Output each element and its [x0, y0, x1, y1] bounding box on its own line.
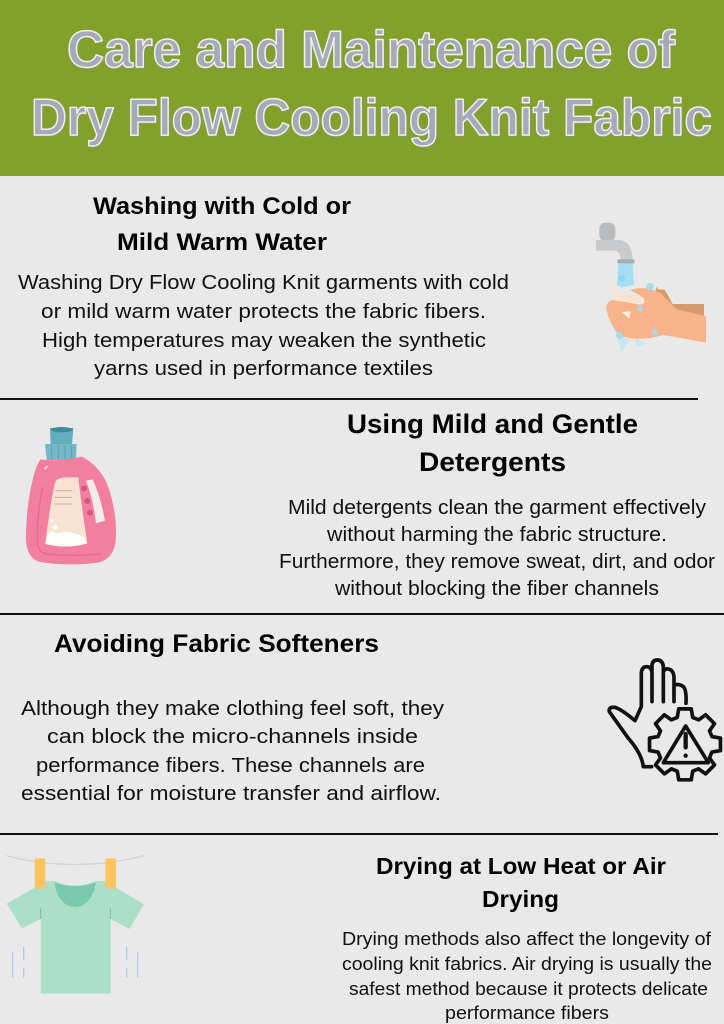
heading: washing: Washing with Cold or — [93, 193, 351, 220]
panel: softeners — [21, 630, 720, 805]
heading: detergents — [347, 409, 638, 477]
icon: washing hands under faucet — [596, 223, 706, 352]
text: detergents: Furthermore, they remove sweat, dirt, and odor — [279, 551, 715, 573]
heading: washing: Mild Warm Water — [117, 229, 327, 256]
heading: detergents: Using Mild and Gentle — [347, 409, 638, 439]
text: washing: Washing Dry Flow Cooling Knit garments with cold — [18, 272, 509, 294]
title: Dry Flow Cooling Knit Fabric — [31, 89, 712, 147]
text: detergents: without blocking the fiber channels — [334, 578, 659, 600]
heading: drying — [376, 853, 666, 912]
text: washing: yarns used in performance textiles — [94, 358, 433, 380]
icon: t-shirt on clothesline — [6, 856, 144, 994]
icon: hand with warning gear — [609, 660, 720, 780]
title — [31, 21, 712, 147]
heading: drying: Drying — [482, 886, 559, 912]
text: detergents: without harming the fabric structure. — [326, 524, 667, 546]
title: Care and Maintenance of — [67, 21, 676, 79]
text: washing — [18, 272, 509, 380]
text: softeners: Although they make clothing feel soft, they — [21, 698, 444, 720]
heading: washing — [93, 193, 351, 256]
text: washing: or mild warm water protects the fabric fibers. — [41, 301, 486, 323]
text: drying: safest method because it protects delicate — [349, 978, 708, 999]
heading: detergents: Detergents — [419, 447, 566, 477]
text: washing: High temperatures may weaken the synthetic — [42, 330, 486, 352]
text: softeners: can block the micro-channels inside — [47, 726, 418, 748]
panel: drying — [6, 853, 712, 1023]
header banner — [0, 0, 724, 176]
text: softeners: performance fibers. These channels are — [36, 755, 425, 777]
panel: washing — [18, 193, 706, 380]
heading: softeners: Avoiding Fabric Softeners — [54, 630, 379, 658]
text: drying: Drying methods also affect the longevity of — [342, 928, 712, 949]
text: detergents: Mild detergents clean the garment effectively — [288, 497, 706, 519]
text: softeners — [21, 698, 444, 805]
text: drying: performance fibers — [445, 1002, 609, 1023]
text: drying: cooling knit fabrics. Air drying is usually the — [342, 953, 712, 974]
text: drying — [342, 928, 712, 1023]
text: softeners: essential for moisture transfer and airflow. — [21, 783, 441, 805]
heading: drying: Drying at Low Heat or Air — [376, 853, 666, 879]
text: detergents — [279, 497, 715, 600]
icon: detergent bottle — [26, 427, 116, 564]
panel: detergents — [26, 409, 715, 600]
